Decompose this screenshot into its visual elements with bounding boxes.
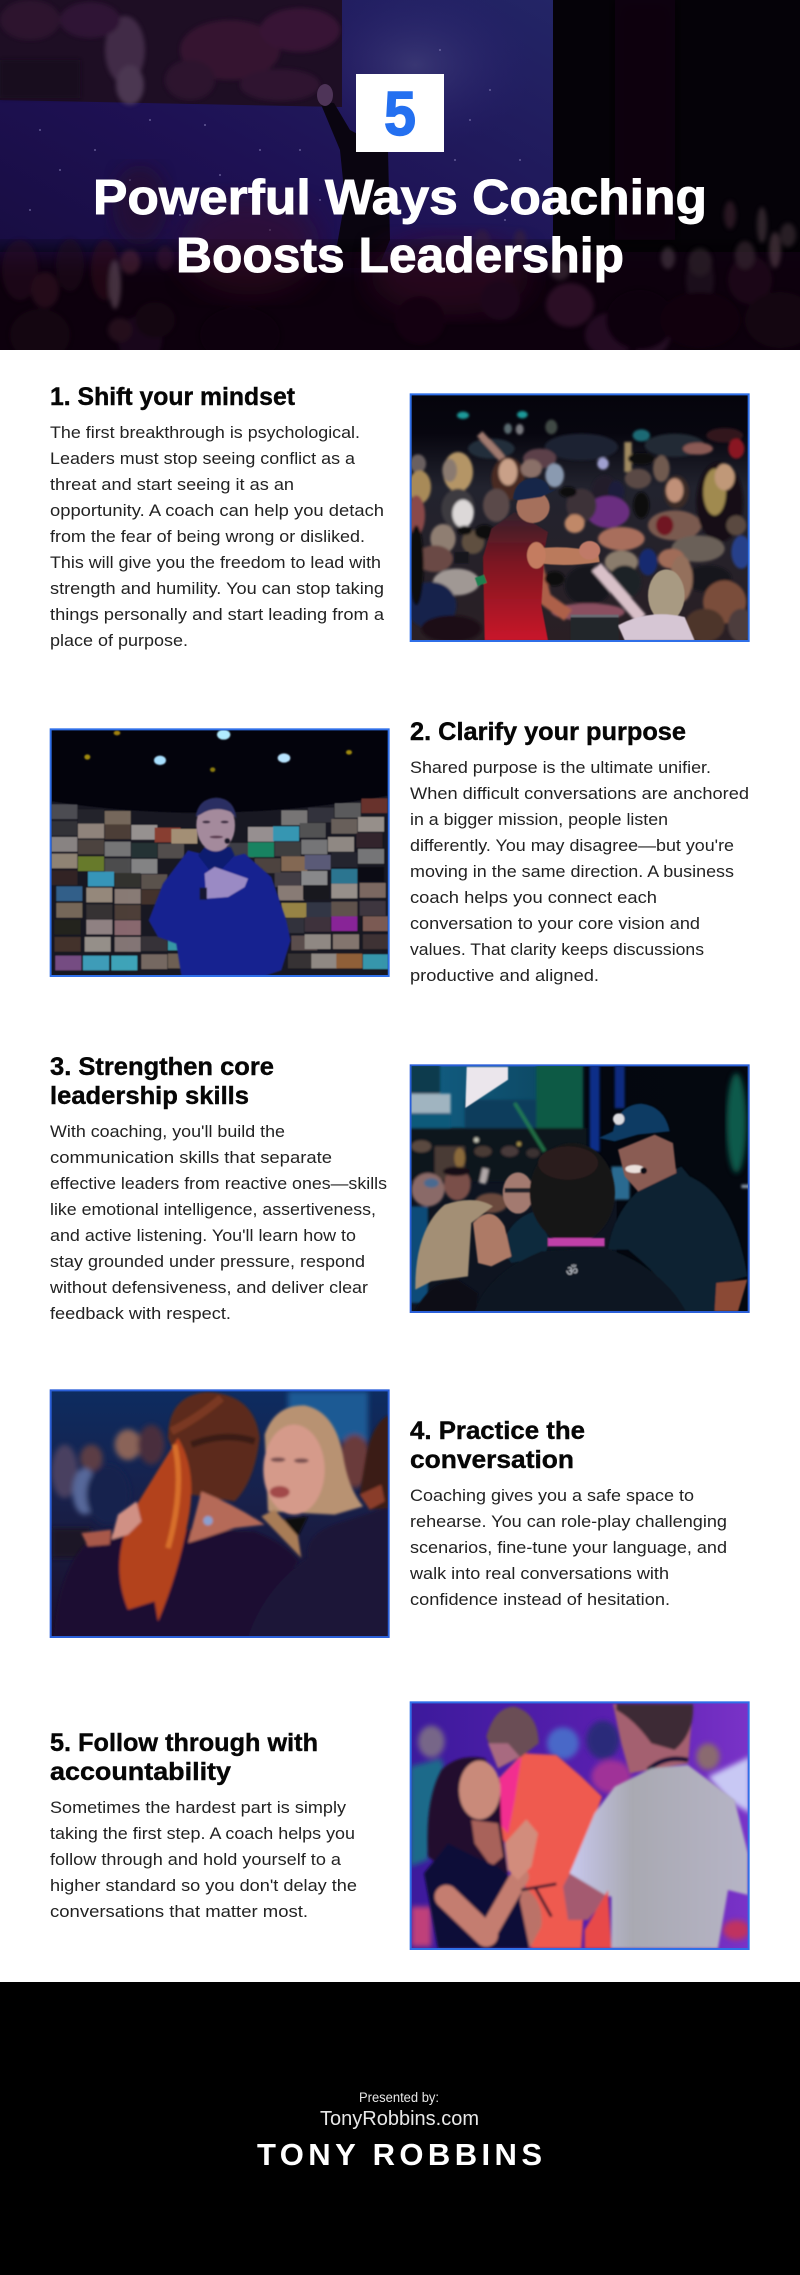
body text 5: higher standard so you don't delay the xyxy=(50,1876,357,1895)
stage lights xyxy=(84,730,352,772)
website: TonyRobbins.com xyxy=(320,2108,479,2130)
photo: coach chatting with attendees xyxy=(410,1064,750,1313)
title: Boosts Leadership xyxy=(176,229,624,283)
body text 1: The first breakthrough is psychological. xyxy=(50,423,360,442)
body text 1 xyxy=(50,423,385,650)
body text 2: conversation to your core vision and xyxy=(410,914,700,933)
body text 2: in a bigger mission, people listen xyxy=(410,810,668,829)
logo wordmark: TONY ROBBINS xyxy=(257,2137,542,2172)
hero banner xyxy=(0,0,800,382)
woman xyxy=(427,1757,508,1873)
section 1: shift your mindset xyxy=(50,383,755,650)
heading 1: 1. Shift your mindset xyxy=(50,383,296,411)
section 3: strengthen core leadership skills xyxy=(49,1053,750,1323)
photo: two attendees embracing xyxy=(50,1389,390,1638)
hands xyxy=(188,1491,265,1543)
crowd silhouettes xyxy=(0,162,800,350)
heading 3: leadership skills xyxy=(50,1082,249,1110)
photo: speaker greeting the crowd xyxy=(406,393,755,642)
man in coral shirt xyxy=(494,1753,602,1948)
body text 2: moving in the same direction. A business xyxy=(410,862,734,881)
photo: speaker with video wall xyxy=(50,728,390,977)
body text 1: from the fear of being wrong or disliked. xyxy=(50,527,365,546)
presented by label: Presented by: xyxy=(359,2090,439,2105)
body text 4: rehearse. You can role-play challenging xyxy=(410,1512,727,1531)
title xyxy=(93,171,707,283)
ponytail xyxy=(119,1438,191,1621)
body text 3: communication skills that separate xyxy=(50,1148,332,1167)
body text 3: effective leaders from reactive ones—skills xyxy=(50,1174,387,1193)
number badge: 5 xyxy=(384,80,416,149)
back left figure xyxy=(54,1528,298,1637)
body text 4: walk into real conversations with xyxy=(409,1564,669,1583)
heading 5: 5. Follow through with xyxy=(50,1729,318,1757)
body text 3: without defensiveness, and deliver clear xyxy=(49,1278,368,1297)
section 5: follow through with accountability xyxy=(50,1701,750,1950)
section 2: clarify your purpose xyxy=(50,718,749,985)
footer xyxy=(0,1982,800,2275)
body text 5: Sometimes the hardest part is simply xyxy=(50,1798,347,1817)
body text 2: productive and aligned. xyxy=(410,966,599,985)
right dark figure xyxy=(248,1506,390,1637)
body text 3: and active listening. You'll learn how to xyxy=(50,1226,356,1245)
blonde woman xyxy=(265,1405,363,1515)
woman xyxy=(415,1200,493,1290)
body text 2: When difficult conversations are anchored xyxy=(410,784,749,803)
body text 1: Leaders must stop seeing conflict as a xyxy=(50,449,356,468)
body text 4: Coaching gives you a safe space to xyxy=(410,1486,694,1505)
title: Powerful Ways Coaching xyxy=(93,171,707,225)
heading 4: 4. Practice the xyxy=(410,1417,585,1445)
body text 1: opportunity. A coach can help you detach xyxy=(50,501,384,520)
speaker figure xyxy=(149,798,291,976)
body text 4: scenarios, fine-tune your language, and xyxy=(410,1538,727,1557)
photo: coach chatting with attendees: ॐ xyxy=(566,1264,578,1279)
body text 3: feedback with respect. xyxy=(50,1304,231,1323)
lanyard man xyxy=(613,1704,693,1773)
heading 3: 3. Strengthen core xyxy=(50,1053,274,1081)
body text 5 xyxy=(50,1798,357,1921)
coach xyxy=(608,1166,747,1311)
auburn head xyxy=(168,1392,260,1501)
body text 3 xyxy=(49,1122,387,1323)
body text 3: like emotional intelligence, assertiveness, xyxy=(50,1200,376,1219)
body text 4: confidence instead of hesitation. xyxy=(410,1590,670,1609)
body text 2: Shared purpose is the ultimate unifier. xyxy=(410,758,711,777)
photo: woman smiling with hands together xyxy=(410,1701,750,1950)
body text 5: conversations that matter most. xyxy=(50,1902,308,1921)
body text 1: threat and start seeing it as an xyxy=(50,475,294,494)
video wall xyxy=(50,795,390,977)
body text 1: place of purpose. xyxy=(50,631,188,650)
body text 2: differently. You may disagree—but you're xyxy=(410,836,734,855)
heading 2: 2. Clarify your purpose xyxy=(410,718,686,746)
heading 5 xyxy=(50,1729,318,1786)
body text 5: taking the first step. A coach helps you xyxy=(50,1824,355,1843)
body text 1: This will give you the freedom to lead with xyxy=(50,553,381,572)
number badge xyxy=(356,74,444,152)
heading 4 xyxy=(410,1417,585,1474)
section 4: practice the conversation xyxy=(50,1389,727,1638)
body text 1: strength and humility. You can stop taking xyxy=(50,579,384,598)
hero background photo xyxy=(0,0,800,382)
body text 4 xyxy=(409,1486,727,1609)
bald man xyxy=(503,1172,533,1214)
speaker silhouette xyxy=(317,84,390,268)
body text 3: With coaching, you'll build the xyxy=(50,1122,285,1141)
body text 1: things personally and start leading from a xyxy=(50,605,385,624)
body text 2: coach helps you connect each xyxy=(410,888,657,907)
body text 2 xyxy=(410,758,749,985)
body text 2: values. That clarity keeps discussions xyxy=(410,940,704,959)
body text 5: follow through and hold yourself to a xyxy=(50,1850,342,1869)
heading 5: accountability xyxy=(50,1758,231,1786)
heading 3 xyxy=(50,1053,274,1110)
heading 4: conversation xyxy=(410,1446,574,1474)
body text 3: stay grounded under pressure, respond xyxy=(50,1252,365,1271)
back of head xyxy=(530,1143,615,1243)
